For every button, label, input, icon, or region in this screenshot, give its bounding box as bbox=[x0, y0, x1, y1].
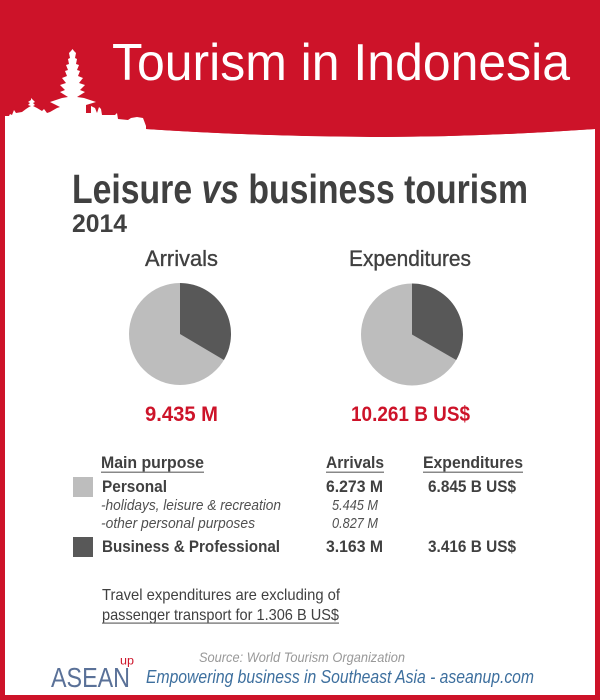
subheading: year: 2014 bbox=[72, 210, 127, 238]
icon: white temple skyline bbox=[5, 49, 370, 150]
note: travel expenditures bbox=[102, 587, 341, 624]
row: other personal purposes bbox=[101, 516, 379, 532]
row: business and professional: 3.163 M bbox=[326, 537, 383, 556]
tagline: Empowering business in Southeast Asia - aseanup.com bbox=[146, 666, 534, 687]
title: Tourism in Indonesia bbox=[112, 34, 570, 92]
logo: ASEAN up: ASEAN bbox=[51, 662, 130, 693]
table: main purpose breakdown bbox=[73, 453, 523, 557]
table header: Arrivals bbox=[326, 453, 384, 472]
heading: expenditures: Expenditures bbox=[349, 246, 471, 271]
pie chart: arrivals bbox=[129, 283, 231, 385]
row: other personal purposes: -other personal purposes bbox=[101, 516, 255, 532]
table header: Main purpose bbox=[101, 453, 204, 472]
table header bbox=[101, 453, 523, 473]
row: personal bbox=[102, 477, 516, 496]
panel: arrivals pie bbox=[129, 246, 231, 426]
source: Source: World Tourism Organization bbox=[199, 649, 405, 665]
row: personal: Personal bbox=[102, 477, 167, 496]
table header: Expenditures bbox=[423, 453, 523, 472]
total: arrivals: 9.435 M bbox=[145, 403, 218, 426]
note: travel expenditures: Travel expenditures are excluding of bbox=[102, 587, 341, 604]
heading: Leisure vs business tourism bbox=[72, 166, 528, 212]
row: personal: 6.845 B US$ bbox=[428, 477, 516, 496]
row: business and professional: 3.416 B US$ bbox=[428, 537, 516, 556]
row: holidays, leisure and recreation: 5.445 M bbox=[332, 498, 379, 514]
row: business and professional bbox=[102, 537, 516, 556]
row: other personal purposes: 0.827 M bbox=[332, 516, 379, 532]
row: business and professional: Business & Professional bbox=[102, 537, 280, 556]
logo: ASEAN up: up bbox=[120, 654, 134, 668]
header: red banner bbox=[0, 0, 600, 137]
pie chart: expenditures bbox=[361, 284, 463, 386]
row: holidays, leisure and recreation bbox=[101, 498, 379, 514]
total: expenditures: 10.261 B US$ bbox=[351, 403, 470, 426]
heading: arrivals: Arrivals bbox=[145, 246, 218, 271]
legend swatch: personal bbox=[73, 477, 93, 497]
note: travel expenditures: passenger transport for 1.306 B US$ bbox=[102, 607, 339, 624]
legend swatch: business bbox=[73, 537, 93, 557]
row: personal: 6.273 M bbox=[326, 477, 383, 496]
panel: expenditures pie bbox=[349, 246, 471, 426]
row: holidays, leisure and recreation: -holidays, leisure & recreation bbox=[101, 498, 281, 514]
